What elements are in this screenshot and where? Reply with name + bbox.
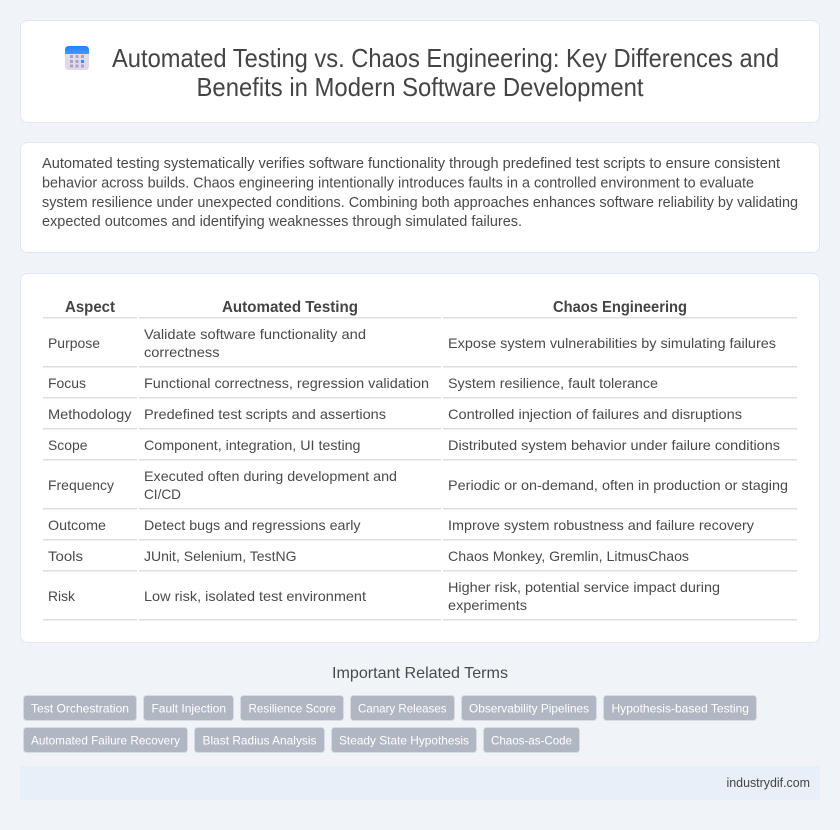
related terms tags [24,696,756,752]
tag: hypothesis-based testing [604,696,756,720]
row: tools: JUnit, Selenium, TestNG [144,548,296,564]
intro text: expected outcomes and identifying weaknesses through simulated failures. [42,214,522,230]
table header row: Aspect [65,299,116,316]
row: methodology: Predefined test scripts and assertions [144,406,386,422]
row: tools: Chaos Monkey, Gremlin, LitmusChaos [448,548,689,564]
row: methodology: Methodology [48,406,132,422]
row: purpose: Expose system vulnerabilities by simulating failures [448,335,776,351]
tag: canary releases [350,696,454,720]
footer source: industrydif.com [726,775,810,790]
related terms heading: Important Related Terms [332,665,508,682]
table card [20,274,820,642]
tag: resilience score [240,696,344,720]
intro text [42,156,798,230]
row: tools: Tools [48,548,83,564]
tag: test orchestration: Test Orchestration [31,702,129,716]
row: outcome: Outcome [48,517,106,533]
icon: calendar [65,46,89,70]
row: scope: Distributed system behavior under failure conditions [448,437,780,453]
intro text: Automated testing systematically verifies software functionality through predefined test scripts to ensure consistent [42,156,780,172]
row: purpose: Validate software functionality and [144,326,366,342]
row: frequency [48,468,788,502]
intro panel [20,142,820,252]
footer bar [20,766,820,800]
tag: blast radius analysis [194,728,324,752]
row: risk: Higher risk, potential service impact during [448,579,720,595]
tag: fault injection [144,696,234,720]
row: focus [48,375,658,391]
row: scope: Scope [48,437,88,453]
title [112,45,779,102]
tag: resilience score: Resilience Score [248,702,336,716]
tag: test orchestration [24,696,136,720]
row: scope [48,437,780,453]
row: outcome [48,517,754,533]
row: frequency: CI/CD [144,486,181,502]
tag: hypothesis-based testing: Hypothesis-based Testing [612,702,749,716]
tag: steady state hypothesis: Steady State Hypothesis [339,734,469,748]
table header row: Chaos Engineering [553,299,687,316]
table header row [65,299,687,316]
row: methodology [48,406,742,422]
row: focus: Focus [48,375,86,391]
tag: observability pipelines: Observability Pipelines [469,702,589,716]
title: Benefits in Modern Software Development [196,74,644,102]
row: outcome: Improve system robustness and failure recovery [448,517,754,533]
row: purpose: correctness [144,344,220,360]
row: focus: System resilience, fault tolerance [448,375,658,391]
row: frequency: Periodic or on-demand, often in production or staging [448,477,788,493]
title: Automated Testing vs. Chaos Engineering: Key Differences and [112,45,779,73]
tag: observability pipelines [462,696,596,720]
tag: automated failure recovery [24,728,188,752]
row: frequency: Executed often during development and [144,468,397,484]
intro text: behavior across builds. Chaos engineering intentionally introduces faults in a controlled environment to evaluate [42,176,754,192]
row: purpose [48,326,776,360]
table header row: Automated Testing [222,299,358,316]
tag: steady state hypothesis [332,728,476,752]
header panel [20,20,820,122]
tag: automated failure recovery: Automated Failure Recovery [31,734,180,748]
row: scope: Component, integration, UI testing [144,437,360,453]
intro card [20,142,820,252]
row: purpose: Purpose [48,335,100,351]
row: frequency: Frequency [48,477,114,493]
tag: chaos-as-code: Chaos-as-Code [491,734,572,748]
intro text: system resilience under unexpected conditions. Combining both approaches enhances software reliability by validating [42,195,798,211]
tag: blast radius analysis: Blast Radius Analysis [202,734,316,748]
row: tools [48,548,689,564]
tag: canary releases: Canary Releases [358,702,446,716]
row: risk: Low risk, isolated test environment [144,588,366,604]
tag: chaos-as-code [484,728,580,752]
row: outcome: Detect bugs and regressions early [144,517,360,533]
header card [20,20,820,122]
row: risk [48,579,720,613]
row: focus: Functional correctness, regression validation [144,375,429,391]
row: risk: Risk [48,588,76,604]
row: risk: experiments [448,597,527,613]
tag: fault injection: Fault Injection [152,702,226,716]
comparison table panel [20,274,820,642]
row: methodology: Controlled injection of failures and disruptions [448,406,742,422]
